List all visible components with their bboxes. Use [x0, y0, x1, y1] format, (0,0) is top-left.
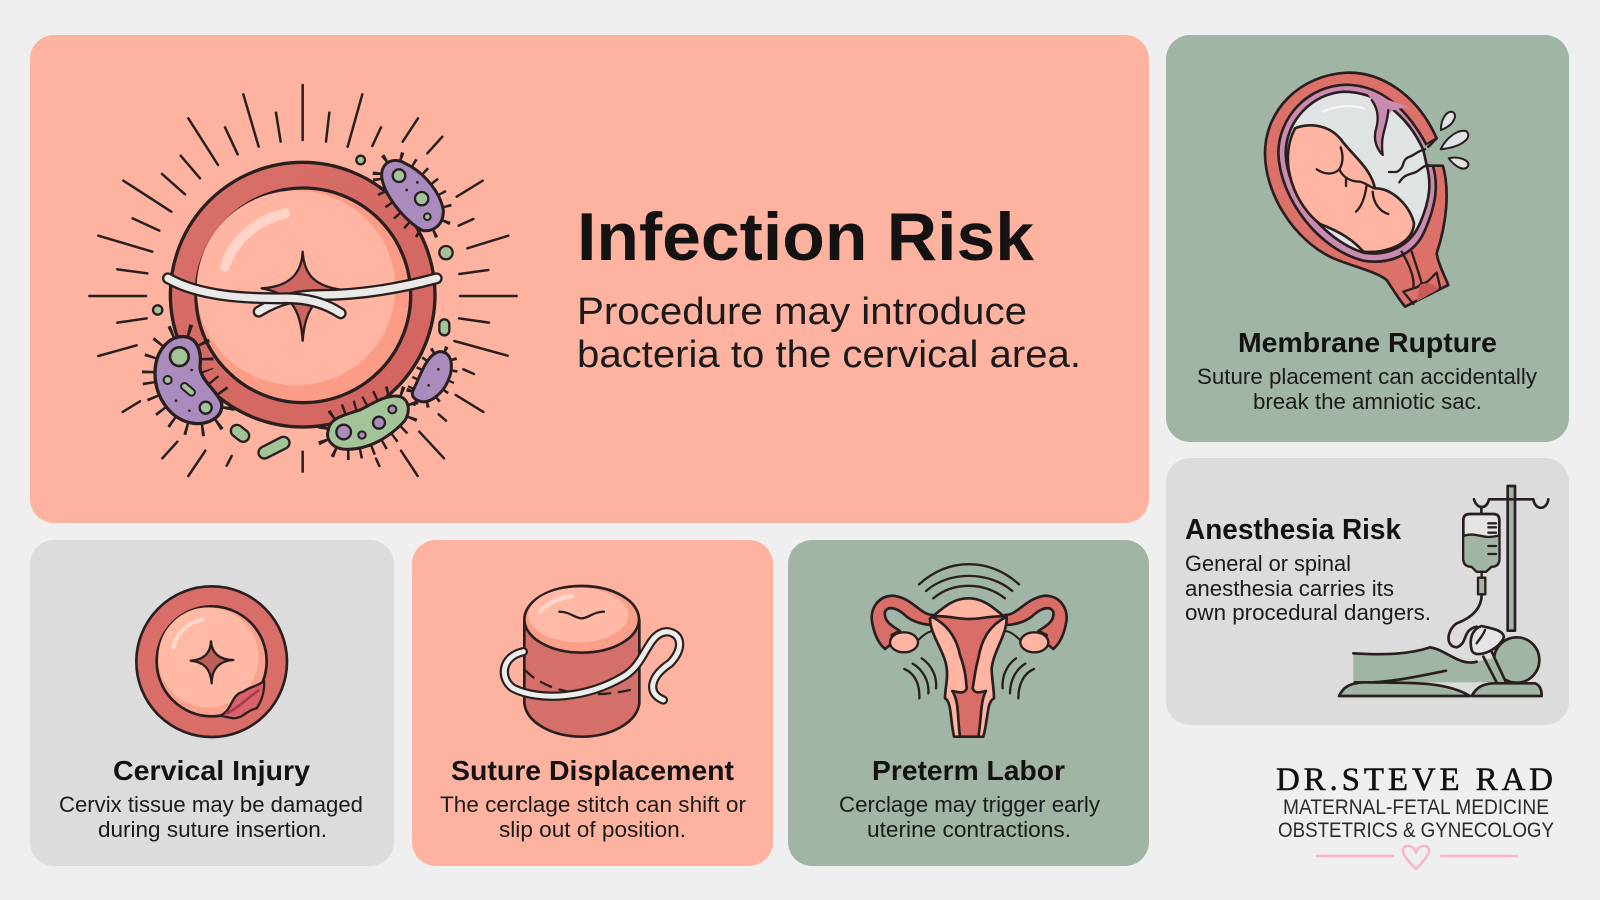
description: anesthesia risk: own procedural dangers.: [1185, 600, 1431, 625]
highlight: [225, 213, 285, 267]
description: infection risk: Procedure may introduce: [577, 291, 1027, 333]
suture stitch: [168, 278, 437, 313]
cervical os: [191, 641, 233, 683]
stitch: [504, 632, 680, 700]
uterus body: [930, 598, 1007, 737]
description: anesthesia risk: anesthesia carries its: [1185, 576, 1394, 601]
description: preterm labor: Cerclage may trigger early: [839, 792, 1100, 817]
bacterium: right small purple: [412, 352, 451, 402]
panel: infection risk: [30, 35, 1149, 523]
IV pole: [1508, 486, 1515, 631]
tubes: [872, 596, 933, 649]
tear wound: [220, 681, 264, 718]
panel: anesthesia risk: [1166, 458, 1569, 725]
description: membrane rupture: [1197, 364, 1537, 414]
heading: suture displacement: Suture Displacement: [451, 755, 734, 786]
description: membrane rupture: break the amniotic sac.: [1253, 389, 1482, 414]
panel: cervical injury: [30, 540, 394, 866]
mask: [1471, 626, 1504, 654]
bacterium: upper right: [382, 160, 443, 231]
IV tube: [1449, 594, 1482, 647]
body: [1353, 647, 1507, 682]
description: suture displacement: The cerclage stitch can shift or: [440, 792, 746, 817]
heading: membrane rupture: Membrane Rupture: [1238, 327, 1497, 358]
illustration: patient with IV drip: [1339, 486, 1548, 696]
head: [1494, 637, 1539, 683]
description: cervical injury: Cervix tissue may be damaged: [59, 792, 363, 817]
panel: membrane rupture: [1166, 35, 1569, 442]
bed: [1339, 682, 1542, 696]
illustration: cervix cylinder with slipped stitch: [504, 586, 680, 737]
amniotic sac: [1286, 92, 1429, 254]
hanger: [1474, 499, 1548, 513]
description: infection risk: [577, 291, 1081, 376]
cervical os: [262, 252, 343, 341]
purple membrane tear: [1367, 93, 1408, 155]
uterine wall: [1265, 73, 1448, 307]
cervix centre: [196, 188, 411, 403]
bacterium: lower left: [155, 337, 222, 424]
amnion layer: [1278, 85, 1436, 262]
illustration: infected cervix with suture and bacteria: [89, 85, 517, 476]
IV bag: [1463, 514, 1499, 594]
description: anesthesia risk: General or spinal: [1185, 551, 1351, 576]
illustration: injured cervix: [136, 586, 287, 737]
logo: Dr. Steve Rad: DR.STEVE RAD: [1276, 762, 1553, 798]
logo: Dr. Steve Rad: OBSTETRICS & GYNECOLOGY: [1278, 819, 1554, 842]
fetus: [1288, 125, 1414, 252]
panel: suture displacement: [412, 540, 773, 866]
uterine cavity: [932, 616, 1007, 737]
heading: infection risk: Infection Risk: [577, 199, 1034, 275]
description: cervical injury: during suture insertion.: [98, 817, 327, 842]
logo heart divider: [1317, 846, 1517, 869]
cervix ring: [170, 162, 435, 427]
water droplets: [1441, 112, 1468, 169]
bacterium: lower right green: [328, 396, 408, 449]
cervical canal: [1402, 252, 1440, 304]
description: suture displacement: [440, 792, 746, 842]
description: suture displacement: slip out of position.: [499, 817, 686, 842]
panel: preterm labor: [788, 540, 1149, 866]
heading: anesthesia risk: Anesthesia Risk: [1185, 514, 1402, 546]
description: infection risk: bacteria to the cervical area.: [577, 334, 1081, 376]
description: cervical injury: [59, 792, 363, 842]
description: preterm labor: [839, 792, 1100, 842]
description: anesthesia risk: [1185, 551, 1431, 625]
loose green bacteria: [153, 156, 453, 461]
ovaries: [890, 632, 918, 652]
heading: cervical injury: Cervical Injury: [113, 755, 310, 786]
tear lines: [1389, 149, 1428, 182]
illustration: contracting uterus: [872, 564, 1067, 737]
radiating lines: [89, 85, 517, 476]
logo: Dr. Steve Rad: MATERNAL-FETAL MEDICINE: [1283, 796, 1549, 819]
heading: preterm labor: Preterm Labor: [872, 755, 1065, 786]
contraction waves: [904, 564, 1034, 698]
description: membrane rupture: Suture placement can accidentally: [1197, 364, 1537, 389]
rupture gap: [1424, 137, 1447, 166]
description: preterm labor: uterine contractions.: [867, 817, 1071, 842]
illustration: ruptured amniotic sac: [1265, 73, 1468, 307]
logo: Dr. Steve Rad: [1276, 762, 1554, 869]
